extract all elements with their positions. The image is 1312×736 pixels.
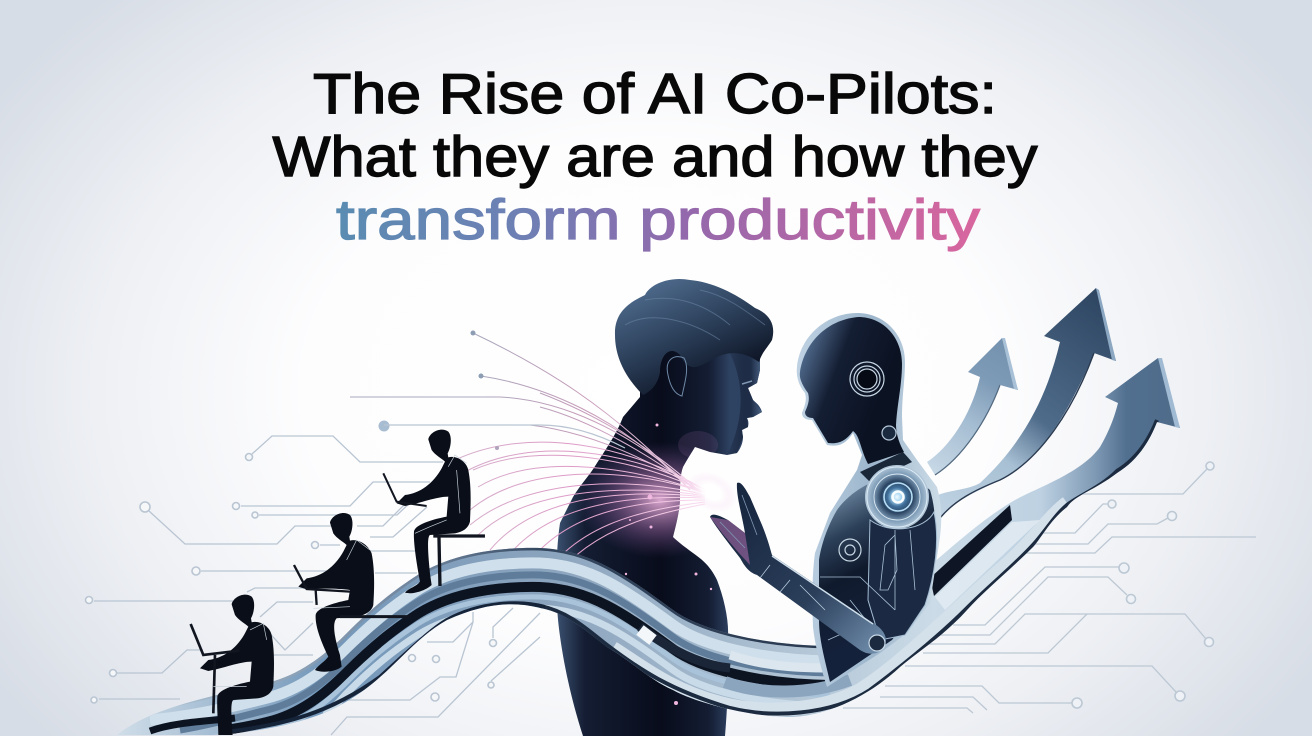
pink glow on shoulder xyxy=(584,446,691,554)
robot collar xyxy=(860,452,912,482)
shoulder cap xyxy=(865,465,929,529)
man silhouette xyxy=(556,279,773,736)
title line 3: gradient: transform productivity xyxy=(336,188,981,252)
highlight xyxy=(213,623,267,687)
chest ring xyxy=(839,539,861,561)
head ring xyxy=(850,362,884,396)
elbow joint xyxy=(869,635,885,651)
ear xyxy=(667,357,687,396)
arm lines xyxy=(760,565,825,610)
robot head dark xyxy=(800,317,904,464)
hair strands xyxy=(625,290,765,340)
highlight xyxy=(415,455,467,533)
title line 1: The Rise of AI Co-Pilots: xyxy=(313,62,997,126)
fan of light lines xyxy=(350,333,705,590)
laptop xyxy=(383,473,427,506)
worker 2 (middle) xyxy=(294,513,410,672)
worker 1 (bottom) xyxy=(191,595,274,735)
eye highlight xyxy=(742,381,752,384)
body xyxy=(397,430,471,593)
title xyxy=(272,62,1038,252)
highlight xyxy=(313,540,370,608)
sparkles xyxy=(625,424,712,705)
shoulder glow xyxy=(680,463,744,521)
left circuit nodes xyxy=(86,454,496,703)
fan origin dots xyxy=(378,330,625,450)
body xyxy=(298,513,374,672)
laptop xyxy=(191,624,239,713)
hand pink tint xyxy=(710,517,750,565)
title line 2: What they are and how they xyxy=(272,125,1038,189)
finger lines xyxy=(720,495,757,548)
light lines grey xyxy=(350,333,702,492)
pink glow on neck xyxy=(678,431,718,459)
circuit traces: left xyxy=(86,436,540,735)
shoulder rings xyxy=(867,467,927,527)
robot upper arm xyxy=(868,512,937,640)
man body and face xyxy=(556,330,762,736)
hair xyxy=(615,279,773,395)
ribbon wave xyxy=(117,358,1180,735)
big arrow head edge xyxy=(1158,358,1180,428)
right circuit nodes xyxy=(1072,462,1214,708)
forearm and hand xyxy=(710,483,886,654)
arrow: small back xyxy=(927,338,1018,475)
light lines pink xyxy=(455,442,705,590)
worker 3 (top) xyxy=(383,430,485,593)
suit details xyxy=(820,530,915,640)
robot torso dark xyxy=(819,470,935,682)
body xyxy=(200,595,274,735)
laptop xyxy=(294,565,350,605)
neck ring xyxy=(882,426,896,440)
seat xyxy=(340,612,410,621)
arrow: tall dark xyxy=(938,288,1116,518)
stool xyxy=(433,536,485,586)
face light xyxy=(727,350,762,455)
arm highlight xyxy=(772,556,873,624)
robot outer shell xyxy=(797,313,941,687)
circuit traces: right xyxy=(843,462,1256,713)
robot xyxy=(710,313,941,687)
ribbon stripes xyxy=(130,420,1157,732)
